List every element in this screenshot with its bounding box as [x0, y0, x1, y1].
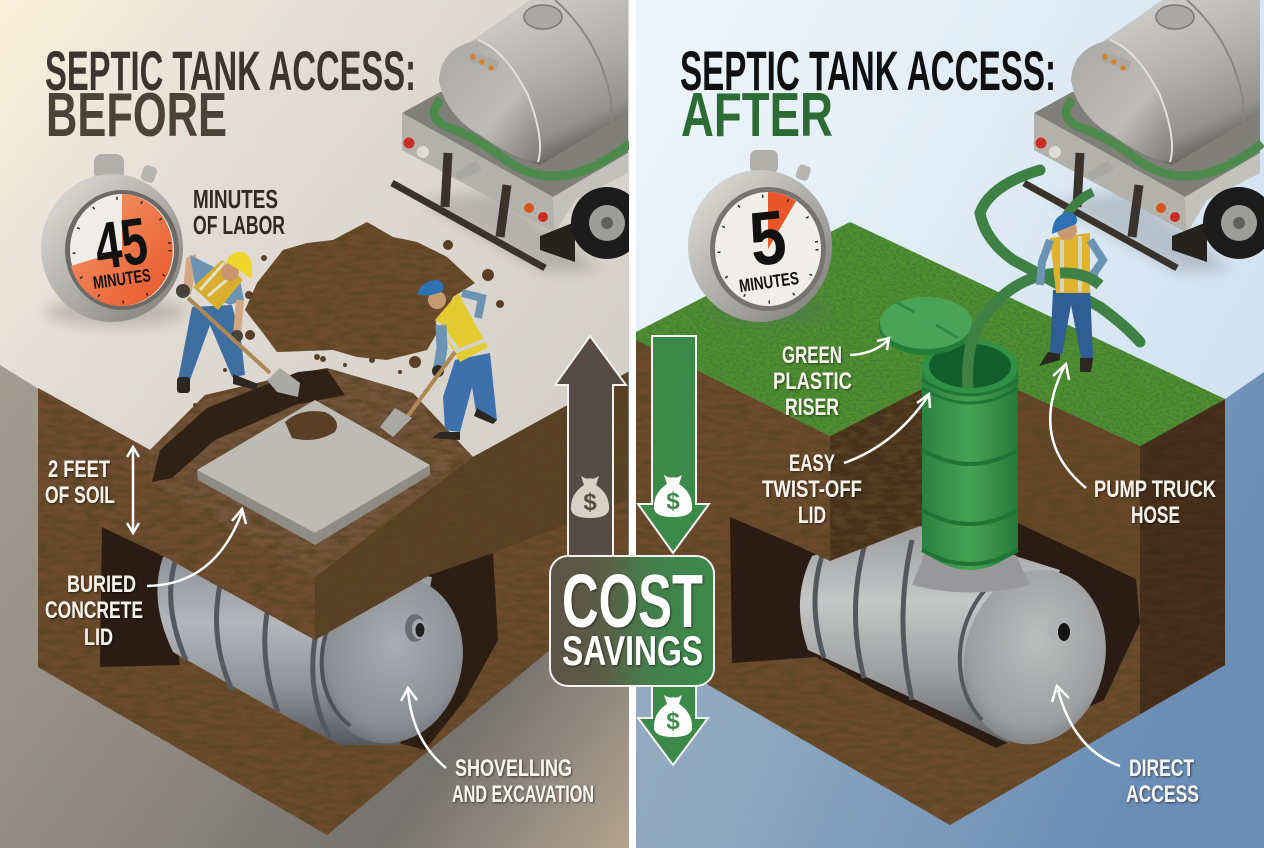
annotation: shovelling and excavation [401, 688, 594, 808]
annotation: easy twist-off lid: LID [798, 502, 826, 529]
label: minutes of labor: OF LABOR [193, 210, 285, 240]
excavated pit floor [150, 368, 473, 577]
pump truck before [392, 0, 643, 272]
annotation: buried concrete lid: LID [84, 624, 113, 651]
arrow: cost down after [638, 336, 709, 553]
hose coil from truck [980, 170, 1140, 342]
icon: money bag [571, 476, 609, 518]
stopwatch: 5 minutes: 5 [745, 195, 790, 283]
callout: cost savings: COST [562, 559, 703, 643]
soil block before [38, 368, 628, 835]
annotation: direct access [1052, 686, 1199, 808]
annotation: 2 feet of soil: OF SOIL [45, 482, 115, 509]
stopwatch: 45 minutes: 45 [90, 203, 152, 283]
hose to coupling [1065, 192, 1093, 218]
annotation: buried concrete lid [45, 509, 246, 651]
green plastic riser [912, 340, 1030, 592]
worker with yellow vest [380, 280, 497, 440]
label: minutes of labor: MINUTES [193, 184, 278, 214]
annotation: easy twist-off lid: TWIST-OFF [762, 476, 862, 503]
panel: before illustration [38, 222, 628, 835]
worker after [1039, 212, 1103, 372]
annotation: easy twist-off lid [762, 394, 930, 529]
annotation: direct access: DIRECT [1129, 755, 1194, 782]
annotation: easy twist-off lid: EASY [789, 450, 835, 477]
annotation: pump truck hose: PUMP TRUCK [1094, 476, 1217, 503]
hose over hands [1060, 273, 1100, 285]
title: after [680, 39, 1056, 150]
icon: money bag: $ [666, 488, 680, 515]
worker with hard hat [176, 252, 300, 397]
annotation: green plastic riser [773, 338, 889, 421]
center divider [629, 0, 636, 848]
dark right face [1140, 399, 1225, 714]
stopwatch: 5 minutes: MINUTES [738, 268, 800, 296]
title: before: BEFORE [46, 81, 227, 150]
soil wall beside riser right [1016, 389, 1140, 579]
pump truck hose [968, 273, 1095, 388]
title: before [45, 39, 416, 150]
panel: after background [636, 0, 1264, 848]
stopwatch: 45 minutes: MINUTES [92, 265, 152, 293]
annotation: green plastic riser: GREEN [782, 342, 842, 369]
callout: cost savings: SAVINGS [562, 627, 703, 674]
annotation: shovelling and excavation: SHOVELLING [455, 755, 572, 782]
annotation: buried concrete lid: BURIED [67, 571, 136, 598]
title: after: AFTER [681, 81, 833, 150]
stopwatch: 45 minutes [41, 154, 186, 326]
tank cavity right [350, 553, 498, 750]
annotation: 2 feet of soil [45, 447, 139, 533]
pump truck after [1024, 0, 1264, 272]
dirt pile [245, 222, 475, 360]
stopwatch: 5 minutes [688, 150, 832, 324]
panel: after illustration [636, 170, 1225, 825]
annotation: green plastic riser: PLASTIC [773, 368, 852, 395]
soil ledge right [315, 372, 628, 640]
annotation: direct access: ACCESS [1126, 781, 1199, 808]
annotation: green plastic riser: RISER [785, 394, 839, 421]
grass surface [636, 222, 1225, 446]
icon: money bag: $ [583, 489, 597, 516]
pit trench shadow [152, 369, 345, 482]
annotation: 2 feet of soil: 2 FEET [48, 456, 110, 483]
septic tank before [157, 553, 480, 758]
panel: before background [0, 0, 629, 848]
soil ledge left [38, 388, 315, 640]
annotation: shovelling and excavation: AND EXCAVATION [452, 781, 594, 808]
title: before: SEPTIC TANK ACCESS: [45, 39, 416, 102]
soil ledge left after [636, 340, 830, 640]
arrow: lower savings [638, 680, 708, 765]
tank cavity left [100, 527, 180, 667]
icon: money bag [654, 475, 692, 517]
tank cavity after [730, 517, 1140, 748]
buried concrete lid [197, 400, 430, 545]
twist-off lid [879, 297, 973, 355]
annotation: pump truck hose [1050, 364, 1217, 529]
soil block after [636, 340, 1225, 825]
scattered dirt clods [193, 240, 504, 407]
icon: money bag: $ [666, 708, 680, 735]
label: minutes of labor [193, 184, 285, 240]
septic tank after [800, 525, 1122, 758]
arrow: cost up before [555, 336, 626, 560]
annotation: pump truck hose: HOSE [1131, 502, 1180, 529]
soil wall beside riser left [830, 389, 922, 561]
callout: cost savings [550, 556, 714, 686]
annotation: buried concrete lid: CONCRETE [45, 597, 143, 624]
